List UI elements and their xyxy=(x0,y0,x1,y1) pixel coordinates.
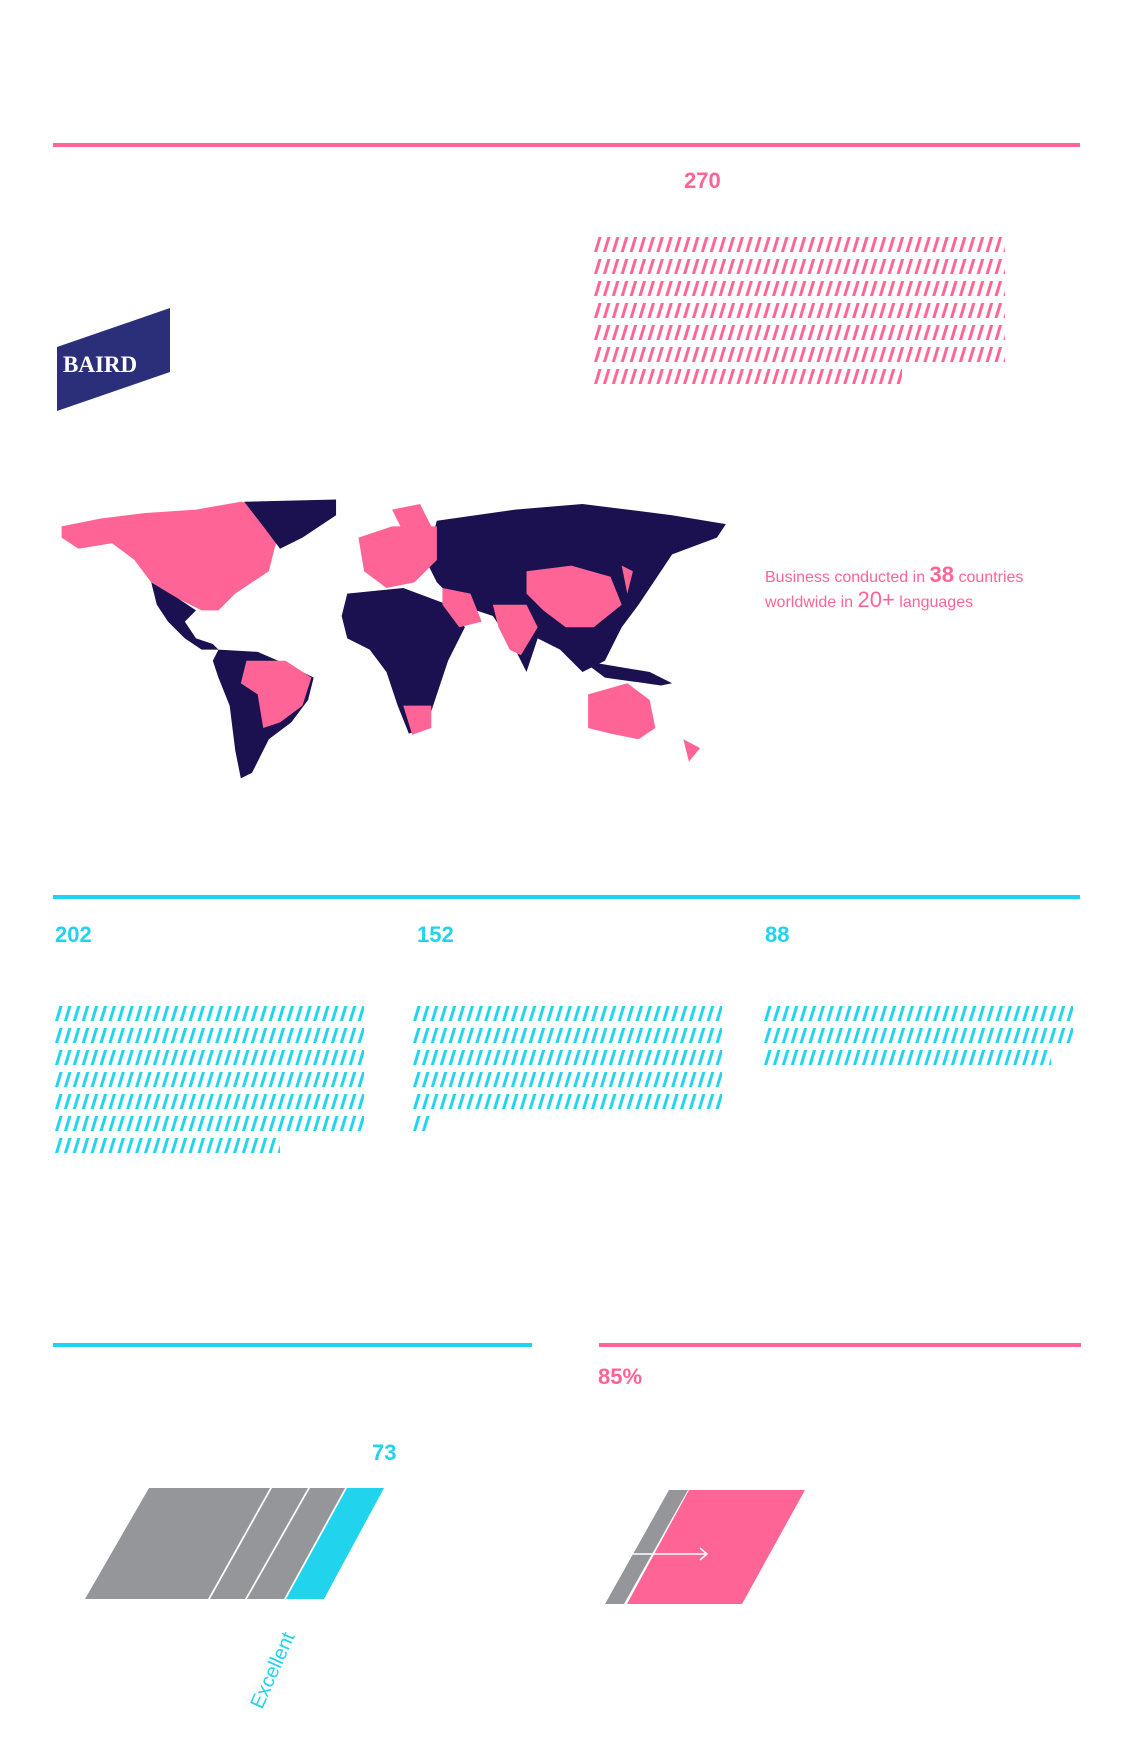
label 85%: 85% xyxy=(598,1364,642,1389)
map caption xyxy=(764,562,1023,612)
label 202: 202 xyxy=(55,922,92,947)
map caption: worldwide in 20+ languages xyxy=(764,587,973,612)
map caption: Business conducted in 38 countries xyxy=(765,562,1023,587)
label 88: 88 xyxy=(765,922,789,947)
cyan divider bottom left xyxy=(53,1343,532,1347)
pink share chart with arrow xyxy=(605,1490,805,1604)
cyan hatch chart 202 xyxy=(55,1006,364,1153)
rating chart xyxy=(85,1488,384,1599)
cyan hatch chart 88 xyxy=(764,1006,1073,1065)
world map xyxy=(62,500,726,778)
rotated label Excellent: Excellent xyxy=(246,1629,300,1712)
pink hatch bar chart 270 xyxy=(594,237,1005,384)
cyan hatch chart 152 xyxy=(413,1006,722,1131)
logo: Baird: BAIRD xyxy=(63,352,137,377)
cyan divider middle xyxy=(53,895,1080,899)
pink divider top xyxy=(53,143,1080,147)
label 73: 73 xyxy=(372,1440,396,1465)
pink divider bottom right xyxy=(599,1343,1081,1347)
label 270: 270 xyxy=(684,168,721,193)
label 152: 152 xyxy=(417,922,454,947)
logo: Baird xyxy=(57,308,170,411)
